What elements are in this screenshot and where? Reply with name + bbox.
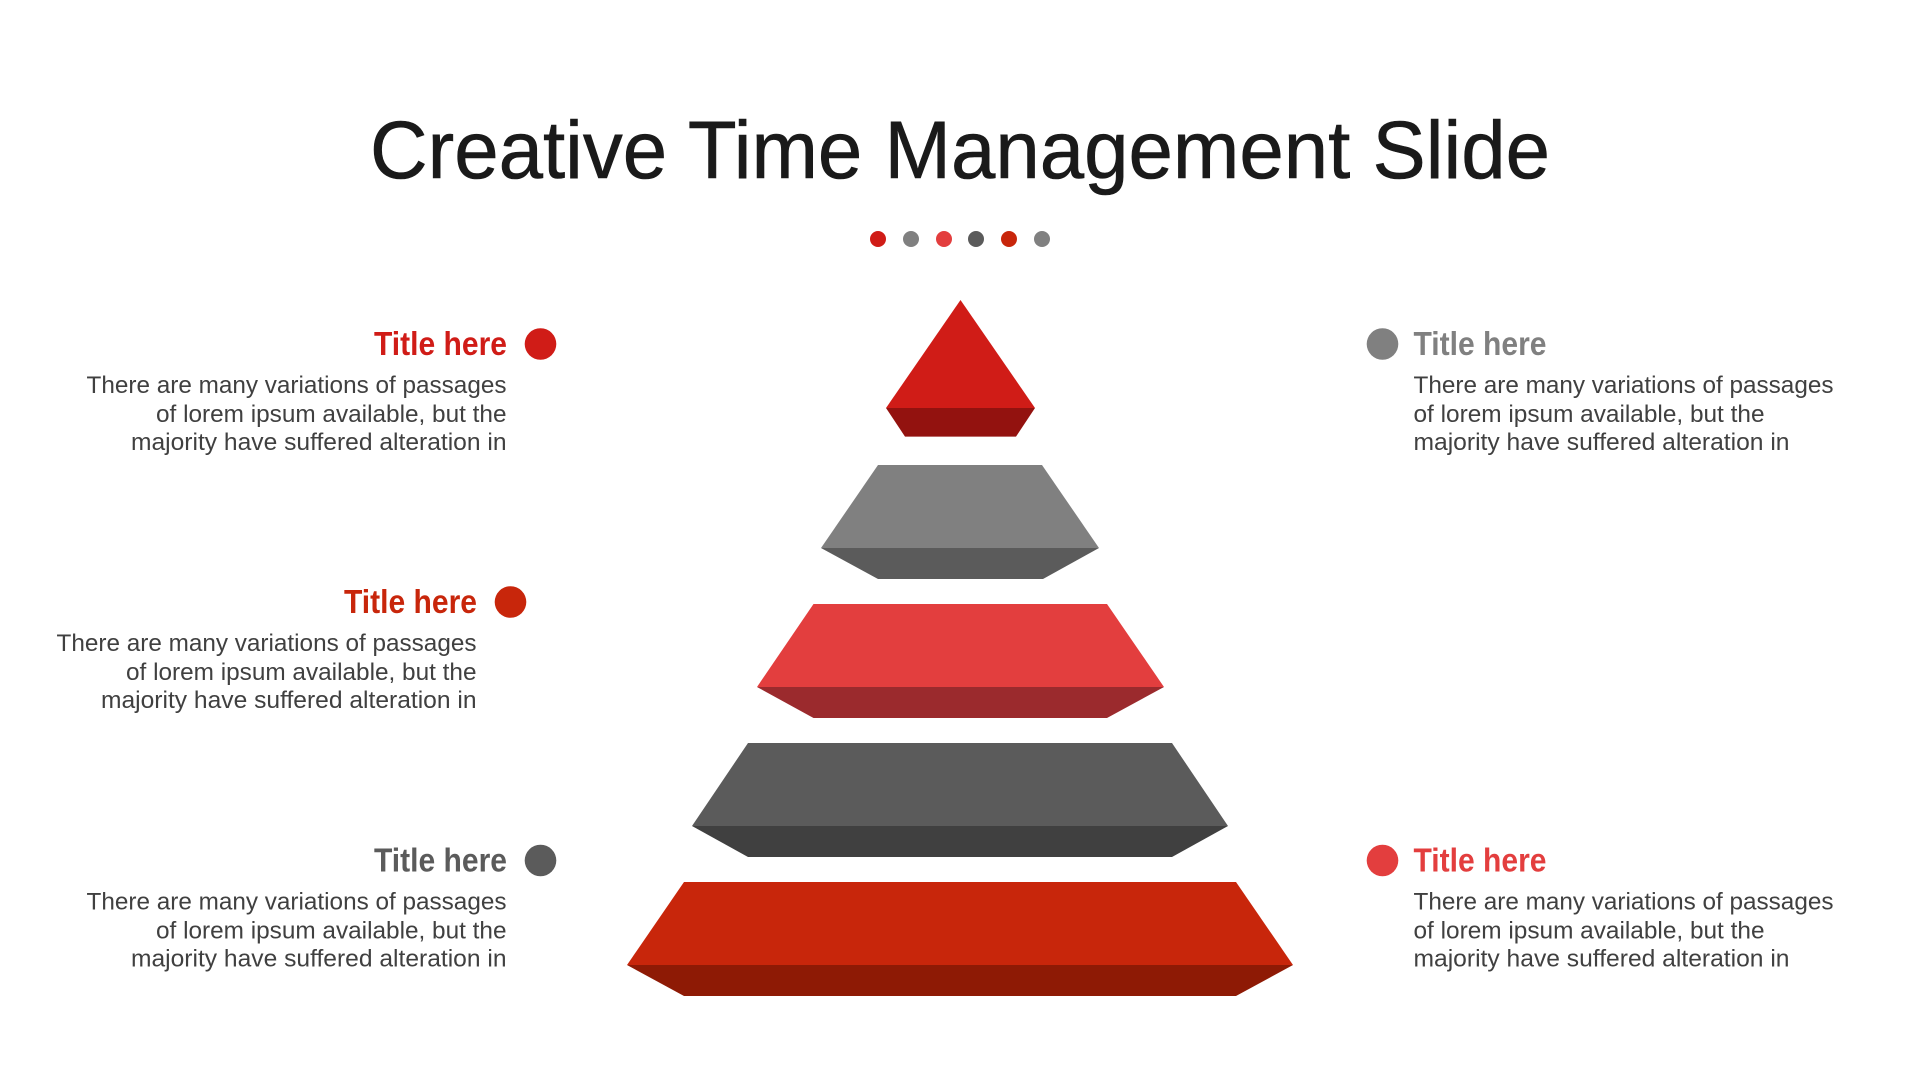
pyramid chart — [627, 300, 1293, 996]
callout: top left — [86, 325, 556, 456]
body text: of lorem ipsum available, but the — [156, 918, 506, 944]
heading: Title here — [1414, 842, 1546, 878]
callout: middle left — [56, 583, 526, 714]
body text: majority have suffered alteration in — [131, 946, 506, 972]
marker dot — [1367, 328, 1398, 360]
body text: majority have suffered alteration in — [131, 429, 506, 456]
body text: There are many variations of passages — [56, 630, 477, 657]
pyramid tier 3 — [757, 604, 1164, 718]
body text: There are many variations of passages — [86, 888, 507, 916]
marker dot — [1367, 845, 1398, 876]
callout: top right — [1367, 325, 1834, 456]
body text: There are many variations of passages — [86, 372, 507, 399]
pyramid tier 2 — [821, 465, 1099, 579]
body text: majority have suffered alteration in — [1414, 946, 1790, 972]
body text — [56, 630, 477, 714]
body text — [1414, 888, 1834, 972]
heading: Title here — [374, 325, 507, 362]
body text: of lorem ipsum available, but the — [156, 401, 506, 428]
body text — [1414, 372, 1834, 456]
body text — [86, 372, 507, 456]
title: Creative Time Management Slide — [370, 105, 1550, 196]
body text: of lorem ipsum available, but the — [126, 659, 476, 686]
heading: Title here — [1414, 325, 1546, 362]
heading: Title here — [374, 842, 507, 878]
pyramid tier 1 — [886, 300, 1035, 437]
decorative dots row — [870, 231, 1050, 247]
body text: majority have suffered alteration in — [1414, 429, 1790, 456]
body text: of lorem ipsum available, but the — [1414, 401, 1764, 428]
body text: There are many variations of passages — [1414, 372, 1834, 399]
body text: of lorem ipsum available, but the — [1414, 918, 1764, 944]
marker dot — [525, 845, 556, 876]
marker dot — [495, 586, 526, 618]
callout: bottom left — [86, 842, 556, 972]
body text: majority have suffered alteration in — [101, 687, 476, 714]
body text: There are many variations of passages — [1414, 888, 1834, 916]
body text — [86, 888, 507, 972]
marker dot — [525, 328, 556, 360]
heading: Title here — [344, 583, 477, 620]
pyramid tier 5 — [627, 882, 1293, 996]
pyramid tier 4 — [692, 743, 1228, 857]
callout: bottom right — [1367, 842, 1834, 972]
